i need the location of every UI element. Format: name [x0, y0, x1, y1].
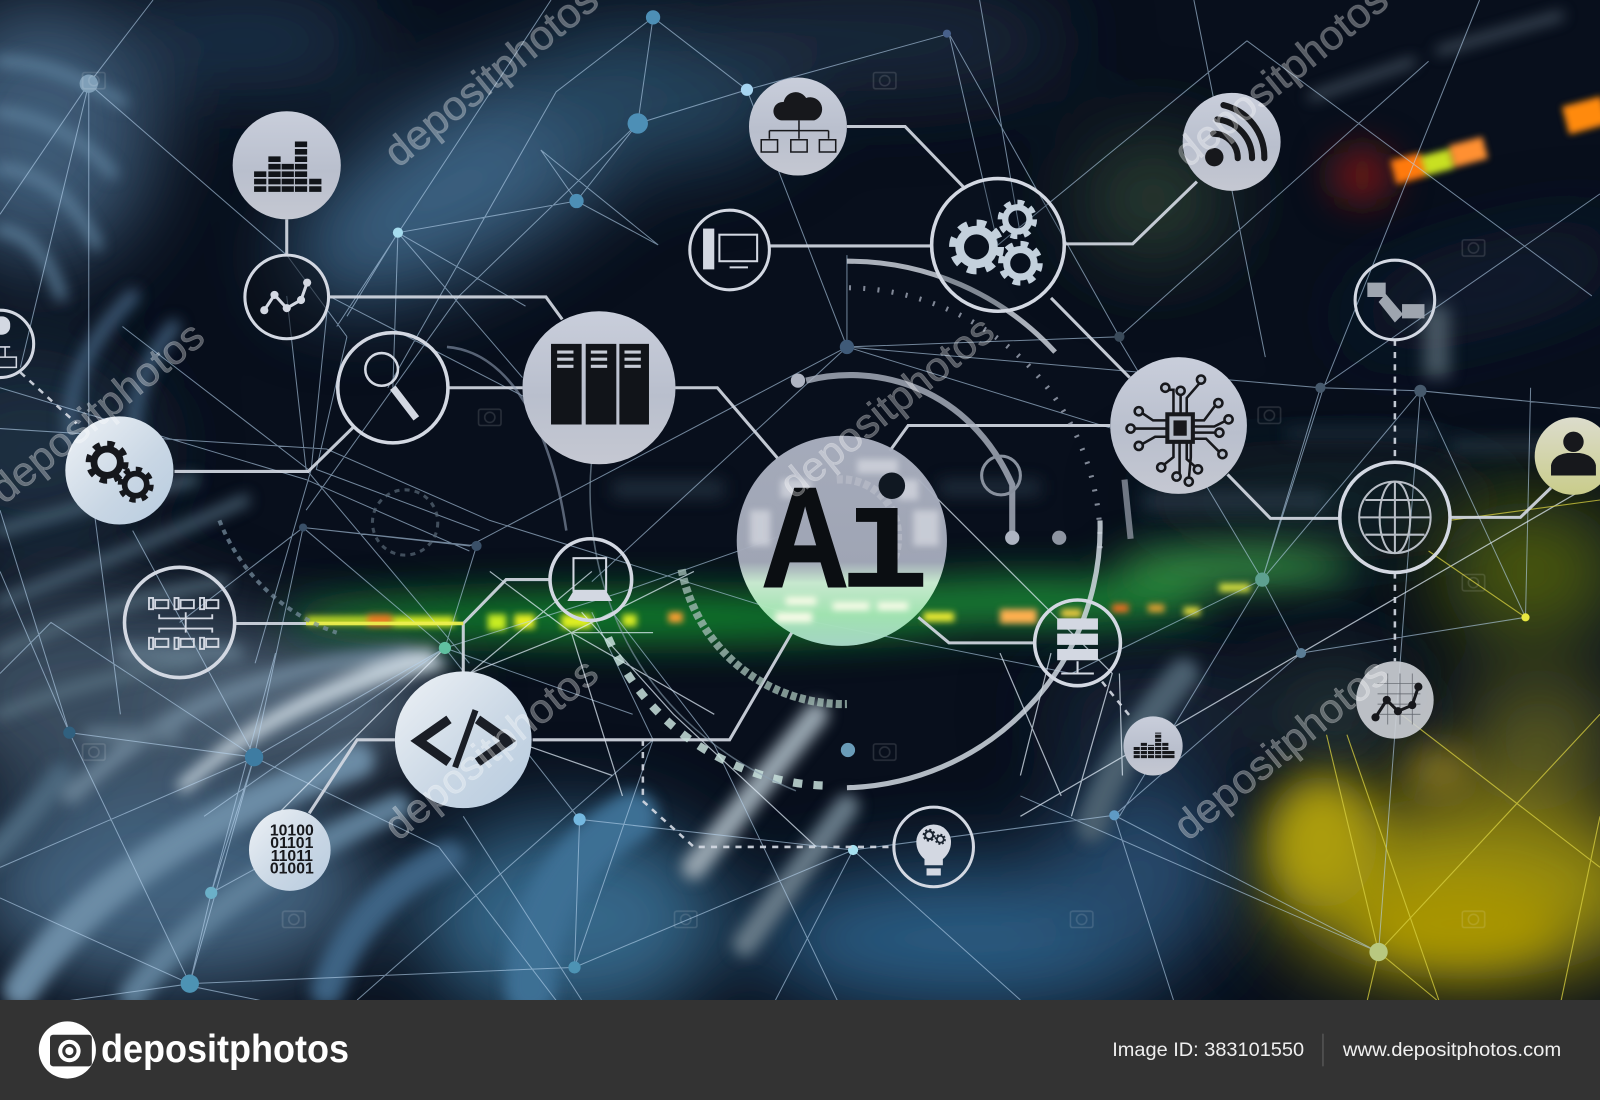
icon: satellite node	[1355, 260, 1435, 340]
icon: globe node	[1340, 462, 1450, 572]
footer logo wordmark: depositphotos	[101, 1028, 349, 1071]
icon: line chart node	[245, 255, 329, 339]
icon: trend chart node	[1356, 661, 1434, 739]
icon: light bulb node	[894, 807, 973, 887]
footer logo icon	[39, 1021, 96, 1079]
icon: person node	[1535, 417, 1600, 495]
icon: binary code node: 10100	[270, 823, 314, 840]
watermark text: depositphotos	[771, 307, 1003, 507]
watermark text	[0, 0, 1396, 849]
icon: laptop node	[550, 539, 632, 620]
central Ai node: A	[761, 459, 849, 618]
icon: code node	[395, 671, 532, 808]
icon: small bar chart node	[1123, 716, 1183, 776]
icon: database node	[1035, 600, 1120, 686]
icon: desktop computer node	[690, 210, 769, 290]
icon: binary code node: 01101	[270, 835, 314, 852]
icon: cloud hierarchy node	[749, 78, 847, 176]
icon: binary code node: 01001	[270, 860, 314, 877]
watermark camera icons	[83, 72, 1485, 928]
icon: wifi node	[1183, 93, 1281, 191]
status lights	[306, 96, 1600, 631]
watermark text: depositphotos	[375, 649, 607, 849]
footer url: www.depositphotos.com	[1342, 1039, 1561, 1061]
icon: binary code node	[249, 809, 331, 891]
icon: microchip node	[1110, 357, 1247, 494]
circuit connector lines	[20, 127, 1551, 847]
icon: binary code node: 11011	[271, 848, 313, 865]
icon: gears node	[65, 416, 173, 524]
blurred server rows	[612, 306, 1600, 512]
decorative hud arcs	[219, 261, 1131, 791]
icon: server racks node	[522, 311, 676, 464]
central Ai node: i	[840, 463, 929, 632]
watermark text: depositphotos	[1164, 649, 1396, 849]
icon: network diagram node	[124, 567, 235, 678]
icon: bar chart node	[233, 111, 341, 219]
central Ai node	[737, 436, 947, 646]
icon: partial network node at left edge	[0, 310, 34, 378]
footer image id: Image ID: 383101550	[1112, 1039, 1304, 1061]
icon: outlined gears node	[932, 179, 1064, 311]
icon: magnifier node	[338, 333, 448, 443]
footer bar	[0, 1000, 1600, 1100]
